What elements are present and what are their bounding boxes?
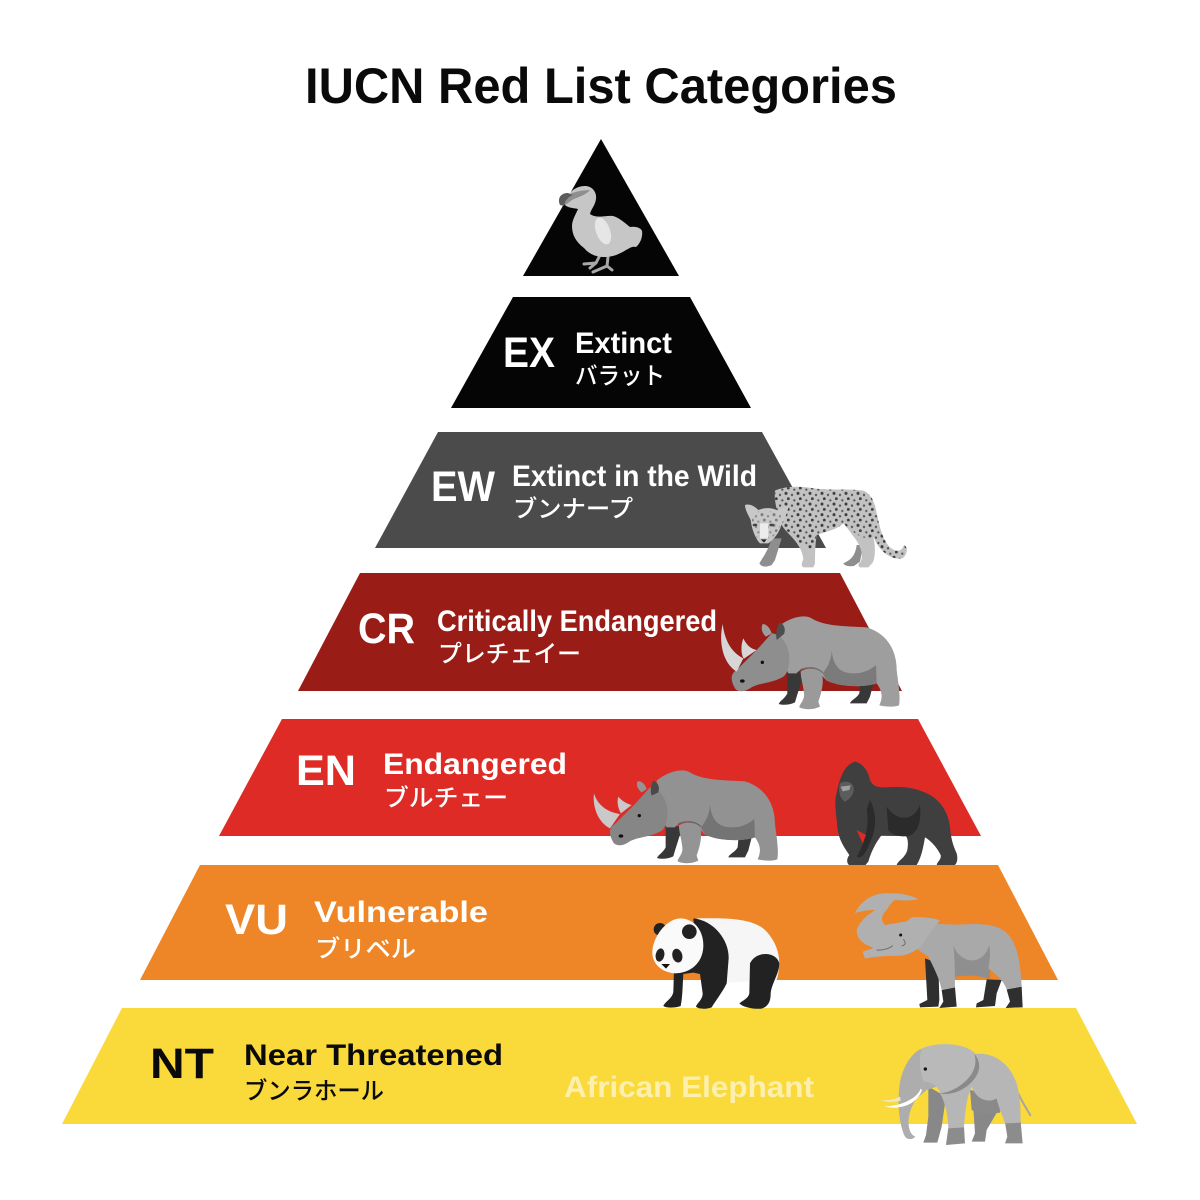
title: IUCN Red List Categories [305,58,897,114]
tier: EX [451,297,751,408]
icon: gorilla [835,762,957,866]
CR code: CR [358,605,415,653]
EW name: Extinct in the Wild [512,460,757,493]
EN code: EN [296,747,356,795]
icon: elephant (vulnerable) [855,893,1023,1008]
EW Japanese label: ブンナープ [513,489,633,524]
tier: EW [375,432,826,548]
tier: NT [62,1008,1137,1124]
tier: CR [298,573,902,691]
icon: elephant (near threatened) [881,1044,1031,1145]
tier: EN [219,719,981,836]
EX Japanese label: バラット [575,356,665,391]
icon: dodo [559,186,642,272]
EX name: Extinct [575,327,672,360]
VU Japanese label: ブリベル [315,929,416,964]
VU name: Vulnerable [314,896,488,929]
EN name: Endangered [383,748,567,781]
apex triangle tier [523,139,679,276]
icon: panda [652,918,779,1009]
NT Japanese label: ブンラホール [244,1071,384,1106]
CR Japanese label: プレチェイー [438,634,581,669]
NT name: Near Threatened [244,1039,503,1072]
EX code: EX [503,329,555,377]
icon: rhino (endangered) [594,770,778,863]
NT code: NT [150,1040,214,1088]
CR name: Critically Endangered [437,605,717,638]
icon: rhino (critically endangered) [721,616,900,709]
African Elephant label: African Elephant [564,1071,814,1104]
tier: VU [140,865,1058,980]
icon: leopard [745,487,907,567]
VU code: VU [225,896,288,944]
EW code: EW [431,463,495,511]
EN Japanese label: ブルチェー [384,778,508,813]
